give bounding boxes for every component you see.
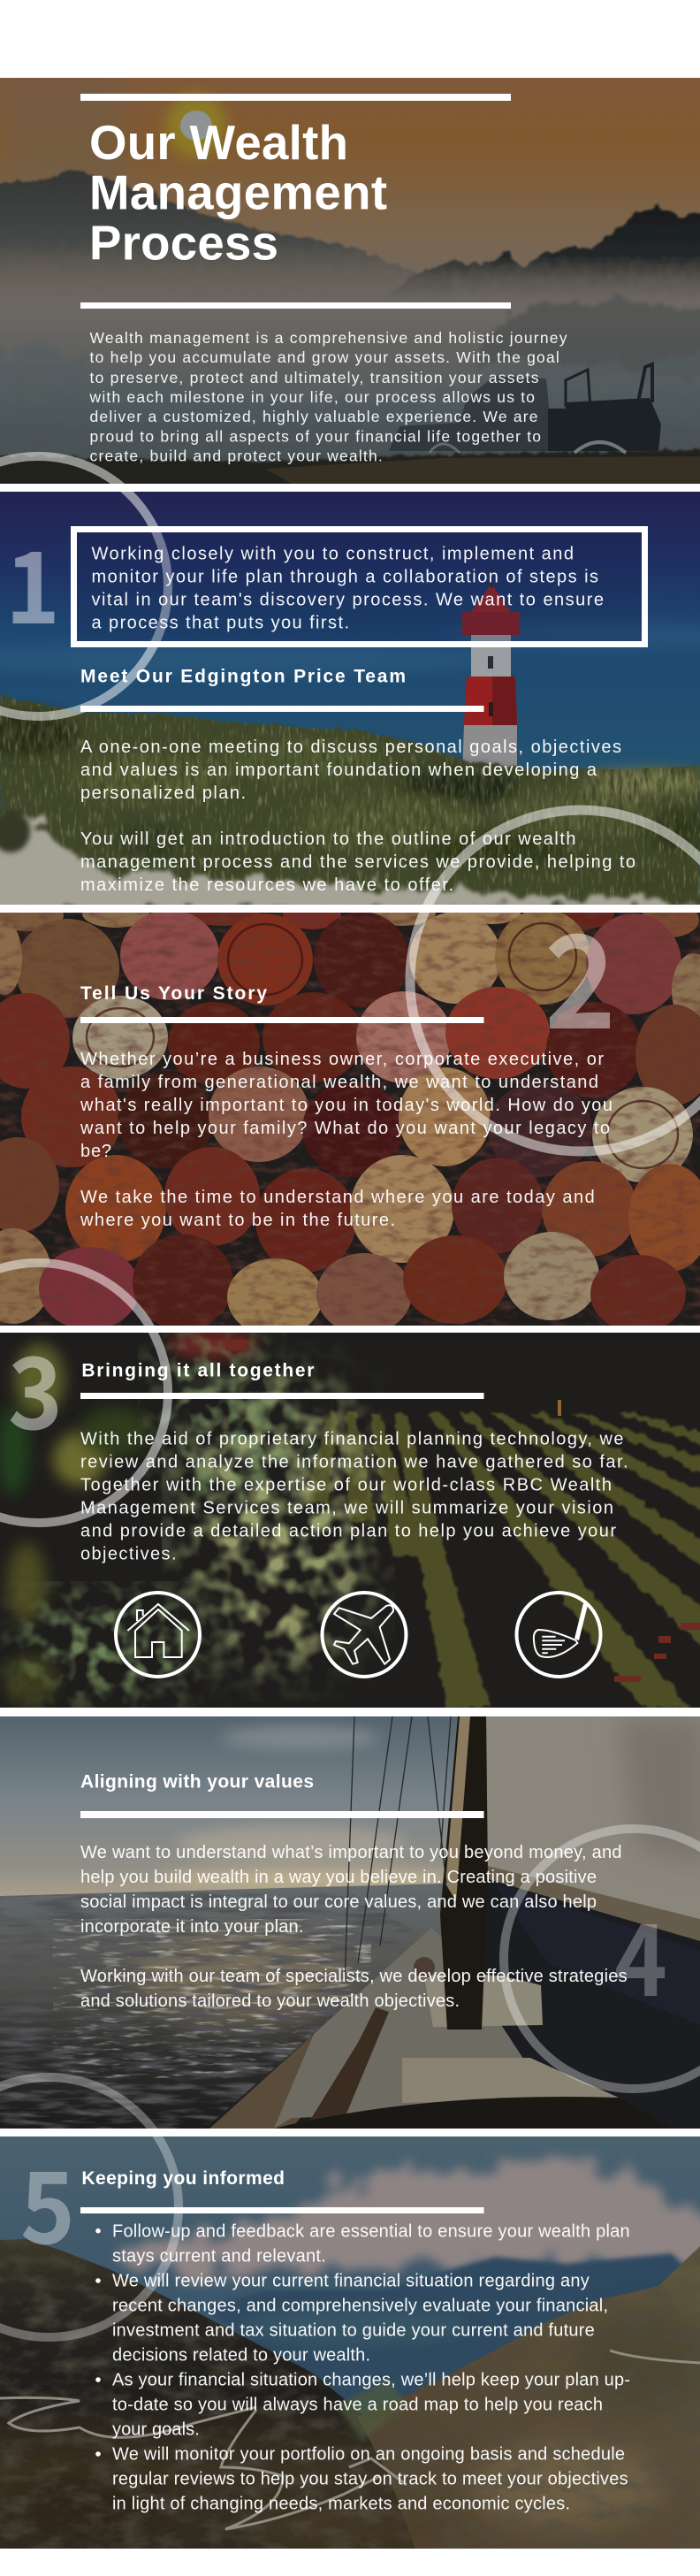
panel: step 3 bringing it all together <box>0 1263 700 1708</box>
heading: Bringing it all together <box>81 1361 314 1381</box>
title <box>89 116 387 270</box>
intro paragraph <box>88 329 567 465</box>
panel: hero introduction <box>0 78 700 495</box>
bullet list: your goals. <box>112 2419 200 2439</box>
number 4: 4 <box>614 1882 667 2025</box>
bullet list: stays current and relevant. <box>112 2246 326 2266</box>
bullet list: We will monitor your portfolio on an ongoing basis and schedule <box>112 2444 625 2464</box>
photo background: misty hills at sunset with jeep <box>0 78 700 495</box>
title: Management <box>89 166 387 220</box>
bullet list: to-date so you will always have a road map to help you reach <box>112 2395 603 2414</box>
body text: be? <box>80 1142 111 1161</box>
icon: house <box>116 1593 200 1677</box>
bullet list: Follow-up and feedback are essential to ensure your wealth plan <box>112 2221 630 2241</box>
body text: management process and the services we provide, helping to <box>80 852 635 872</box>
number 1: 1 <box>5 509 60 653</box>
callout box: a process that puts you first. <box>92 613 349 632</box>
rule <box>80 1393 484 1399</box>
body text: social impact is integral to our core values, and we can also help <box>80 1892 597 1912</box>
circle outline: step 5 <box>0 2077 179 2337</box>
body text: a family from generational wealth, we want to understand <box>80 1073 598 1092</box>
callout box: Working closely with you to construct, implement and <box>92 544 574 563</box>
rule <box>80 1017 484 1023</box>
title: Our Wealth <box>89 116 348 170</box>
photo background: sailboat at sea <box>0 1716 700 2129</box>
number 5: 5 <box>20 2129 75 2273</box>
body text: objectives. <box>80 1544 177 1563</box>
number 3: 3 <box>8 1315 63 1458</box>
heading: Keeping you informed <box>81 2168 285 2189</box>
body text: and solutions tailored to your wealth objectives. <box>80 1991 460 2011</box>
body text <box>80 1843 628 2011</box>
icon: golf club <box>516 1593 601 1677</box>
body text: help you build wealth in a way you believe in. Creating a positive <box>80 1868 597 1887</box>
rule <box>80 1811 484 1818</box>
callout box: vital in our team's discovery process. We want to ensure <box>92 590 604 609</box>
photo background: lighthouse and dunes <box>0 492 700 911</box>
heading: Aligning with your values <box>80 1772 314 1792</box>
heading: Meet Our Edgington Price Team <box>80 667 406 687</box>
body text: Together with the expertise of our world-class RBC Wealth <box>80 1475 612 1494</box>
panel: step 2 tell us your story <box>0 810 700 1336</box>
body text <box>80 1050 612 1230</box>
body text: what's really important to you in today's world. How do you <box>80 1096 612 1115</box>
body text <box>80 1429 628 1563</box>
bullet list: We will review your current financial situation regarding any <box>112 2271 590 2290</box>
body text: We take the time to understand where you are today and <box>80 1188 595 1207</box>
rule <box>80 2207 484 2213</box>
panel: step 4 aligning with your values <box>0 1716 700 2129</box>
intro paragraph: deliver a customized, highly valuable experience. We are <box>90 408 537 425</box>
body text: You will get an introduction to the outline of our wealth <box>80 829 576 849</box>
body text: Working with our team of specialists, we develop effective strategies <box>80 1967 628 1986</box>
photo background: mountain road <box>0 2136 700 2549</box>
callout box <box>74 529 645 644</box>
body text: maximize the resources we have to offer. <box>80 875 453 895</box>
bullet list: recent changes, and comprehensively evaluate your financial, <box>112 2296 608 2315</box>
bullet list: decisions related to your wealth. <box>112 2345 370 2365</box>
top rule <box>80 94 511 101</box>
body text: personalized plan. <box>80 784 246 803</box>
body text: and values is an important foundation when developing a <box>80 761 597 780</box>
body text: review and analyze the information we have gathered so far. <box>80 1452 628 1471</box>
icon: airplane <box>322 1593 407 1677</box>
number 2: 2 <box>544 880 616 1066</box>
circle outline: step 3 <box>0 1263 168 1523</box>
bullet list: in light of changing needs, markets and economic cycles. <box>112 2494 570 2513</box>
body text: want to help your family? What do you want your legacy to <box>80 1119 610 1138</box>
lower rule <box>80 302 511 309</box>
body text: where you want to be in the future. <box>80 1211 395 1230</box>
photo background: vineyard rows <box>0 1330 700 1708</box>
bullet list: investment and tax situation to guide your current and future <box>112 2320 595 2340</box>
circle outline: step 1 <box>0 456 168 716</box>
body text: Management Services team, we will summarize your vision <box>80 1498 613 1517</box>
intro paragraph: to preserve, protect and ultimately, transition your assets <box>90 369 539 386</box>
intro paragraph: proud to bring all aspects of your financial life together to <box>90 428 541 446</box>
intro paragraph: create, build and protect your wealth. <box>90 447 383 465</box>
intro paragraph: with each milestone in your life, our process allows us to <box>88 388 535 406</box>
body text: Whether you’re a business owner, corporate executive, or <box>80 1050 604 1069</box>
heading: Tell Us Your Story <box>80 983 267 1004</box>
callout box: monitor your life plan through a collaboration of steps is <box>92 567 598 586</box>
intro paragraph: Wealth management is a comprehensive and holistic journey <box>90 329 567 347</box>
circle outline: step 2 <box>410 810 700 1151</box>
body text: With the aid of proprietary financial planning technology, we <box>80 1429 624 1449</box>
bullet list <box>95 2221 630 2513</box>
body text: We want to understand what’s important to you beyond money, and <box>80 1843 622 1862</box>
body text: and provide a detailed action plan to help you achieve your <box>80 1521 616 1540</box>
body text: A one-on-one meeting to discuss personal goals, objectives <box>80 738 621 757</box>
rule <box>80 706 484 712</box>
panel: step 5 keeping you informed <box>0 2077 700 2549</box>
intro paragraph: to help you accumulate and grow your assets. With the goal <box>90 348 559 366</box>
body text <box>80 738 635 895</box>
panel: step 1 meet the team <box>0 456 700 911</box>
title: Process <box>89 216 278 270</box>
bullet list: regular reviews to help you stay on track to meet your objectives <box>112 2469 628 2488</box>
circle outline: step 4 <box>504 1829 700 2089</box>
photo background: wine corks <box>0 898 700 1336</box>
bullet list: As your financial situation changes, we’ll help keep your plan up- <box>112 2370 630 2389</box>
body text: incorporate it into your plan. <box>80 1917 303 1937</box>
